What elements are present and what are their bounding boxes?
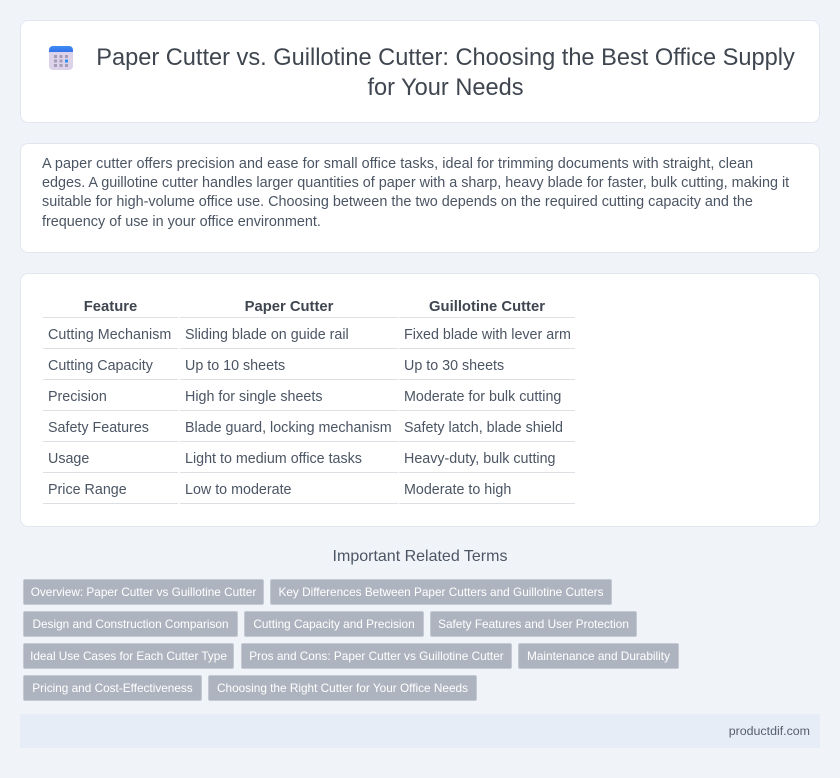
comparison table: High for single sheets (185, 389, 322, 405)
comparison table: Moderate to high (404, 482, 511, 498)
related terms tags: Pricing and Cost-Effectiveness (32, 681, 193, 695)
comparison table: Usage (48, 451, 89, 467)
comparison table: Up to 10 sheets (185, 358, 285, 374)
intro text: A paper cutter offers precision and ease for small office tasks, ideal for trimming documents with straight, clean (42, 156, 753, 172)
comparison table: Sliding blade on guide rail (185, 327, 349, 343)
related terms tags: Choosing the Right Cutter for Your Office Needs (217, 681, 468, 695)
related terms tags: Safety Features and User Protection (438, 617, 629, 631)
related terms tags (23, 579, 679, 701)
comparison table: Precision (48, 389, 107, 405)
title (96, 45, 795, 101)
intro text (42, 156, 790, 230)
related terms tags: Pros and Cons: Paper Cutter vs Guillotine Cutter (249, 649, 504, 663)
intro text: frequency of use in your office environment. (42, 214, 321, 230)
comparison table: Low to moderate (185, 482, 292, 498)
related terms tags: Cutting Capacity and Precision (253, 617, 415, 631)
icon: calendar (49, 46, 73, 70)
intro text: edges. A guillotine cutter handles larger quantities of paper with a sharp, heavy blade for faster, bulk cutting, making it (42, 175, 789, 191)
comparison table: Guillotine Cutter (429, 299, 545, 315)
related terms tags: Key Differences Between Paper Cutters and Guillotine Cutters (278, 585, 604, 599)
comparison table: Safety Features (48, 420, 149, 436)
related terms heading: Important Related Terms (333, 548, 507, 565)
comparison table: Safety latch, blade shield (404, 420, 563, 436)
table panel (20, 273, 820, 527)
title: for Your Needs (367, 75, 524, 101)
comparison table: Moderate for bulk cutting (404, 389, 561, 405)
related terms tags: Design and Construction Comparison (32, 617, 229, 631)
comparison table: Heavy-duty, bulk cutting (404, 451, 556, 467)
comparison table: Blade guard, locking mechanism (185, 420, 392, 436)
related terms tags: Maintenance and Durability (527, 649, 670, 663)
intro panel (20, 143, 820, 253)
comparison table: Fixed blade with lever arm (404, 327, 571, 343)
comparison table: Cutting Mechanism (48, 327, 171, 343)
comparison table: Up to 30 sheets (404, 358, 504, 374)
comparison table: Feature (84, 299, 137, 315)
related terms tags: Ideal Use Cases for Each Cutter Type (30, 649, 227, 663)
comparison table: Paper Cutter (245, 299, 333, 315)
footer bar (20, 714, 820, 748)
footer text: productdif.com (729, 724, 810, 738)
comparison table: Cutting Capacity (48, 358, 153, 374)
intro text: suitable for high-volume office use. Choosing between the two depends on the required cutting capacity and the (42, 194, 753, 210)
comparison table: Price Range (48, 482, 127, 498)
comparison table (43, 299, 575, 504)
title: Paper Cutter vs. Guillotine Cutter: Choosing the Best Office Supply (96, 45, 795, 71)
header panel (20, 20, 820, 123)
comparison table: Light to medium office tasks (185, 451, 362, 467)
related terms tags: Overview: Paper Cutter vs Guillotine Cutter (31, 585, 256, 599)
